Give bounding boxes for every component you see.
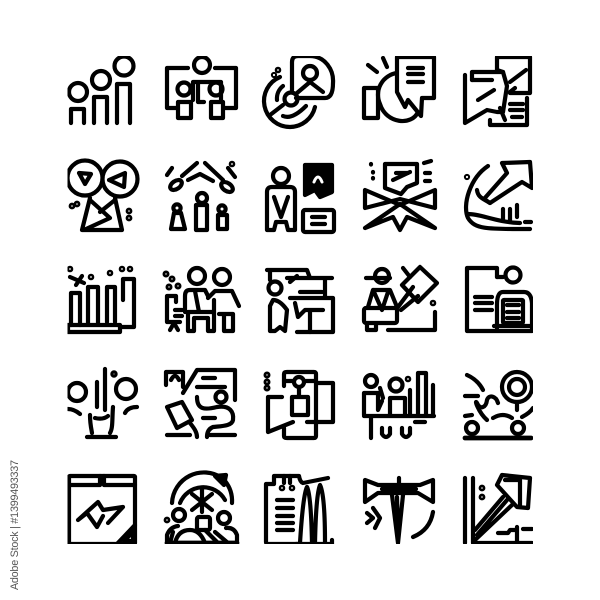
icon: growing people bars [69, 56, 134, 123]
icon: family under roof [167, 163, 235, 230]
credit text: Adobe Stock | #1399493337 [9, 460, 21, 590]
icon: target with person balloon [264, 56, 333, 127]
icon: square note with map [69, 476, 135, 544]
icon: target gauge with squiggle route [465, 372, 533, 438]
icon: hand with document speech bubble [364, 57, 434, 121]
icon: person with bookmark and card [267, 165, 334, 232]
icon: folder with person and document [467, 268, 532, 331]
icon: seated person with pen and paper [364, 267, 437, 330]
icon: clipboard with spikes [266, 476, 332, 544]
icon: bow with nail and chevrons [365, 478, 433, 543]
icon: diagonal arrow and chart [465, 475, 532, 543]
icon: plant with two circles [68, 369, 137, 437]
icon: presenter with two listeners [167, 57, 236, 118]
icon: stacked chat bubbles and notes [465, 57, 530, 125]
icon: phone with person and side panels [266, 372, 333, 438]
icon: bar chart columns with plane [68, 268, 134, 332]
icon: meeting at a board [166, 370, 235, 437]
icon: document on ribbon bow [365, 161, 435, 230]
icon: people and bar chart [364, 373, 434, 438]
icon: arrow out of globe with bars [466, 162, 532, 229]
icon: team under dome with star [166, 472, 237, 543]
icon: couple next to a flip chart [165, 268, 239, 331]
icon: presenter at a board [267, 270, 333, 332]
icon: two hearts balloons on envelope [68, 160, 138, 230]
